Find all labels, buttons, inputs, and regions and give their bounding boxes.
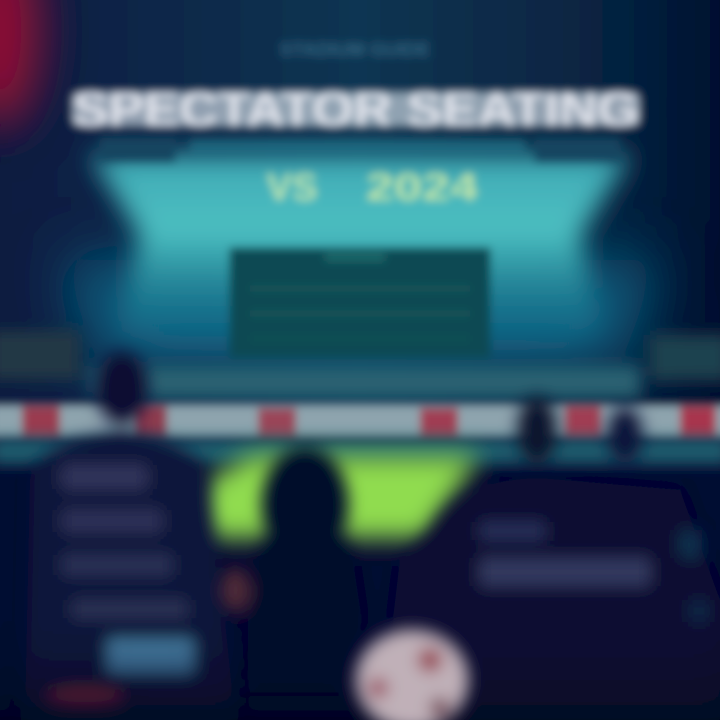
highlighted yellow text: VS — [267, 167, 317, 209]
football pitch — [160, 455, 480, 538]
spectators right with info panel — [380, 396, 720, 720]
bottom shade — [0, 620, 720, 720]
advertising barrier — [0, 405, 720, 437]
scoreboard — [230, 248, 490, 358]
spectator centre silhouette — [221, 447, 362, 690]
bottom left red accent — [43, 683, 127, 707]
lower teal band — [0, 438, 720, 464]
football — [356, 630, 468, 720]
subtitle dark blocks — [100, 138, 620, 162]
title: SPECTATOR SEATING — [73, 83, 639, 137]
upper stands — [0, 330, 720, 398]
eyebrow text: STADIUM GUIDE — [280, 40, 430, 61]
spectator left with info panel — [25, 352, 235, 720]
floodlight glow — [60, 155, 660, 365]
highlighted yellow text: 2024 — [366, 167, 478, 209]
highlighted yellow text — [267, 167, 478, 209]
